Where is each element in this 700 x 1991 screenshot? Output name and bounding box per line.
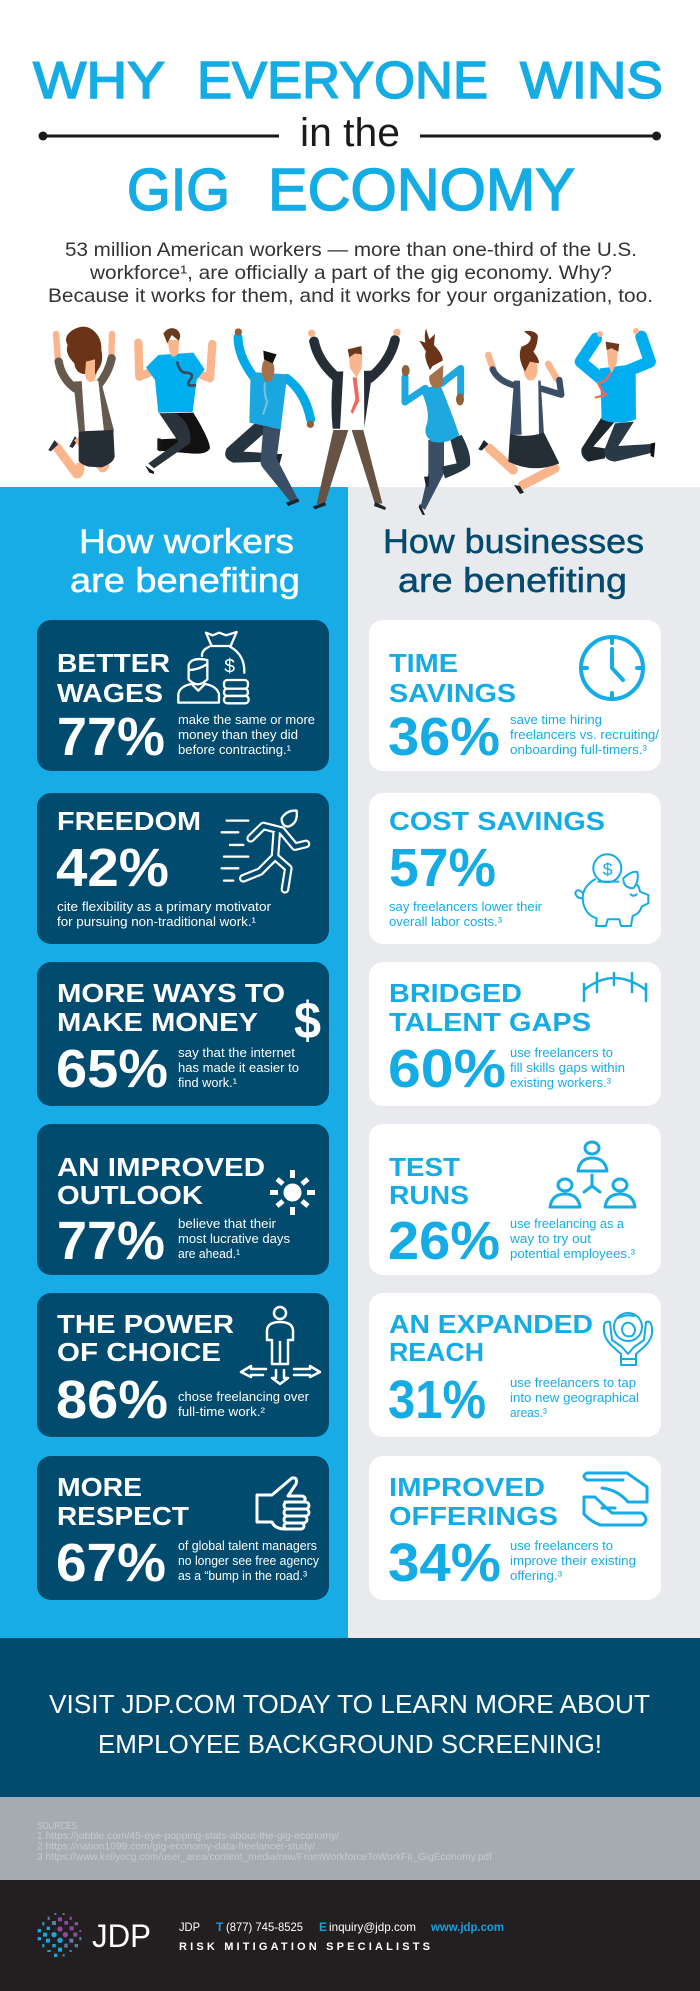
panel: time savings xyxy=(369,620,661,771)
panel: time savings: SAVINGS xyxy=(389,678,516,708)
tagline: RISK MITIGATION SPECIALISTS xyxy=(179,1941,430,1953)
title: WHY xyxy=(33,52,165,110)
panel: more ways to make money: say that the internet xyxy=(178,1046,296,1060)
panel: more respect: no longer see free agency xyxy=(178,1554,320,1568)
person: curly-haired woman xyxy=(48,327,115,474)
person: man in blue hoodie xyxy=(581,328,655,462)
panel: test runs xyxy=(369,1124,661,1275)
panel: cost savings: 57% xyxy=(389,838,496,898)
panel: an expanded reach xyxy=(369,1293,661,1437)
panel: cost savings: say freelancers lower their xyxy=(389,900,542,914)
panel: more ways to make money xyxy=(37,962,329,1106)
panel: test runs: use freelancing as a xyxy=(510,1217,624,1231)
heading: businesses xyxy=(383,523,644,600)
title: WINS xyxy=(520,52,663,110)
panel: the power of choice: full-time work.² xyxy=(178,1405,265,1419)
panel: cost savings: overall labor costs.³ xyxy=(389,915,502,929)
panel: more ways to make money: has made it easier to xyxy=(178,1061,299,1075)
panel: the power of choice: THE POWER xyxy=(57,1309,234,1339)
panel: the power of choice: OF CHOICE xyxy=(57,1337,221,1367)
panel: an expanded reach: areas.³ xyxy=(510,1406,547,1420)
panel: freedom: for pursuing non-traditional work.¹ xyxy=(57,915,256,929)
person: woman with ponytail xyxy=(478,331,561,494)
panel: the power of choice: 86% xyxy=(56,1370,168,1430)
icon: three people network xyxy=(550,1142,635,1207)
panel: an improved outlook: believe that their xyxy=(178,1217,276,1231)
panel: an improved outlook: 77% xyxy=(57,1211,165,1271)
panel: test runs: potential employees.³ xyxy=(510,1247,635,1261)
panel: more ways to make money: 65% xyxy=(56,1039,168,1099)
panel: improved offerings: use freelancers to xyxy=(510,1539,613,1553)
call to action band: VISIT JDP.COM TODAY TO LEARN MORE ABOUT xyxy=(49,1689,650,1719)
heading: workers: are benefiting xyxy=(70,562,300,600)
panel: more ways to make money: MORE WAYS TO xyxy=(57,978,285,1008)
panel: time savings: onboarding full-timers.³ xyxy=(510,743,647,757)
panel: an expanded reach: 31% xyxy=(388,1370,486,1430)
panel: bridged talent gaps: existing workers.³ xyxy=(510,1076,611,1090)
icon: clock xyxy=(581,637,643,699)
contact line: E xyxy=(319,1920,327,1934)
panel: improved offerings: OFFERINGS xyxy=(389,1501,558,1531)
illustration: jumping people xyxy=(48,327,655,515)
contact line: inquiry@jdp.com xyxy=(329,1920,416,1934)
panel: time savings: freelancers vs. recruiting/ xyxy=(510,728,660,742)
panel: better wages: money than they did xyxy=(178,728,298,742)
title: EVERYONE xyxy=(197,52,488,110)
title: ECONOMY xyxy=(268,157,575,223)
panel: bridged talent gaps xyxy=(369,962,661,1106)
call to action band xyxy=(0,1638,700,1797)
icon: piggy bank: $ xyxy=(603,859,613,879)
panel: an expanded reach: AN EXPANDED xyxy=(389,1309,593,1339)
icon: thumbs up xyxy=(257,1478,309,1529)
panel: test runs: 26% xyxy=(388,1211,500,1271)
panel: more ways to make money: find work.¹ xyxy=(178,1076,237,1090)
icon: giving hands xyxy=(584,1473,647,1525)
panel: freedom: 42% xyxy=(56,838,169,898)
title: GIG xyxy=(127,157,230,223)
title: in the xyxy=(300,111,400,155)
panel: an improved outlook: most lucrative days xyxy=(178,1232,290,1246)
panel: an improved outlook: AN IMPROVED xyxy=(57,1152,265,1182)
icon: hands holding globe xyxy=(604,1313,652,1365)
panel: improved offerings: offering.³ xyxy=(510,1569,562,1583)
panel: test runs: way to try out xyxy=(509,1232,592,1246)
intro text: 53 million American workers — more than one-third of the U.S. xyxy=(65,239,637,261)
panel: cost savings xyxy=(369,793,661,944)
sources band: 3 https://www.kellyocg.com/user_area/content_media/raw/FromWorkforceToWorkFit_GigEconomy.pdf xyxy=(37,1852,492,1863)
footer xyxy=(0,1880,700,1991)
logo mark: JDP dots xyxy=(38,1913,81,1957)
panel: time savings: TIME xyxy=(389,648,458,678)
panel: test runs: TEST xyxy=(389,1152,460,1182)
sources band xyxy=(0,1797,700,1880)
panel: bridged talent gaps: BRIDGED xyxy=(389,978,522,1008)
panel: better wages: BETTER xyxy=(57,648,170,678)
icon: running person xyxy=(222,811,306,889)
panel: freedom xyxy=(37,793,329,944)
logo wordmark: JDP xyxy=(92,1918,151,1954)
panel: more ways to make money: MAKE MONEY xyxy=(57,1007,258,1037)
sources band: 2 https://nation1099.com/gig-economy-data-freelancer-study/ xyxy=(37,1842,315,1852)
sources band: SOURCES xyxy=(37,1821,77,1832)
panel: bridged talent gaps: TALENT GAPS xyxy=(389,1007,591,1037)
panel: an improved outlook: are ahead.¹ xyxy=(178,1247,240,1261)
sources band: 1 https://jobble.com/45-eye-popping-stats-about-the-gig-economy/ xyxy=(37,1831,339,1842)
panel: workers background xyxy=(0,487,348,1638)
panel: freedom: FREEDOM xyxy=(57,806,201,836)
heading: businesses: are benefiting xyxy=(398,562,627,600)
panel: more respect: RESPECT xyxy=(57,1501,189,1531)
intro text xyxy=(48,239,653,307)
contact line: T xyxy=(216,1920,224,1934)
panel: freedom: cite flexibility as a primary motivator xyxy=(57,900,271,914)
contact line: (877) 745-8525 xyxy=(226,1920,303,1934)
contact line xyxy=(179,1920,504,1934)
panel: better wages: before contracting.¹ xyxy=(178,743,291,757)
panel: better wages: make the same or more xyxy=(178,713,315,727)
panel: bridged talent gaps: use freelancers to xyxy=(510,1046,613,1060)
panel: bridged talent gaps: fill skills gaps within xyxy=(510,1061,625,1075)
panel: an expanded reach: into new geographical xyxy=(510,1391,639,1405)
person: man in suit xyxy=(308,329,401,510)
icon: money bag and person xyxy=(178,632,249,703)
icon: person at crossroads xyxy=(241,1307,320,1384)
panel: more respect: MORE xyxy=(57,1472,142,1502)
contact line: www.jdp.com xyxy=(430,1920,504,1934)
person: man in blue sweater xyxy=(225,328,314,506)
title divider right xyxy=(420,132,661,140)
intro text: Because it works for them, and it works for your organization, too. xyxy=(48,285,653,307)
person: man in blue tee xyxy=(138,328,212,474)
panel: improved offerings xyxy=(369,1456,661,1600)
panel: improved offerings: 34% xyxy=(388,1533,501,1593)
icon: dollar sign: $ xyxy=(294,992,321,1050)
contact line: JDP xyxy=(179,1920,200,1934)
panel: better wages: 77% xyxy=(57,707,165,767)
icon: sun xyxy=(270,1170,315,1215)
panel: the power of choice xyxy=(37,1293,329,1437)
panel: time savings: 36% xyxy=(388,707,500,767)
call to action band: EMPLOYEE BACKGROUND SCREENING! xyxy=(98,1729,602,1759)
panel: businesses background xyxy=(348,487,700,1638)
panel: more respect: 67% xyxy=(56,1533,166,1593)
heading: workers xyxy=(70,523,300,600)
icon: bridge xyxy=(584,973,646,1001)
panel: improved offerings: IMPROVED xyxy=(389,1472,545,1502)
panel: the power of choice: chose freelancing over xyxy=(178,1390,309,1404)
person: woman with flying hair xyxy=(402,328,470,515)
panel: more respect: of global talent managers xyxy=(178,1539,317,1553)
panel: more respect xyxy=(37,1456,329,1600)
panel: bridged talent gaps: 60% xyxy=(388,1039,506,1099)
panel: improved offerings: improve their existing xyxy=(510,1554,636,1568)
panel: an improved outlook: OUTLOOK xyxy=(57,1180,203,1210)
panel: time savings: save time hiring xyxy=(510,713,602,727)
panel: better wages xyxy=(37,620,329,771)
intro text: workforce¹, are officially a part of the gig economy. Why? xyxy=(89,262,612,284)
panel: cost savings: COST SAVINGS xyxy=(389,806,605,836)
panel: test runs: RUNS xyxy=(389,1180,469,1210)
panel: more respect: as a “bump in the road.³ xyxy=(178,1569,307,1583)
heading: businesses: How businesses xyxy=(383,523,644,561)
panel: an expanded reach: REACH xyxy=(389,1337,484,1367)
panel: an expanded reach: use freelancers to tap xyxy=(510,1376,636,1390)
panel: an improved outlook xyxy=(37,1124,329,1275)
panel: better wages: WAGES xyxy=(57,678,163,708)
icon: piggy bank xyxy=(575,854,648,926)
icon: money bag and person: $ xyxy=(224,657,235,678)
title divider left xyxy=(38,132,279,140)
title xyxy=(33,52,663,223)
heading: workers: How workers xyxy=(79,523,294,561)
